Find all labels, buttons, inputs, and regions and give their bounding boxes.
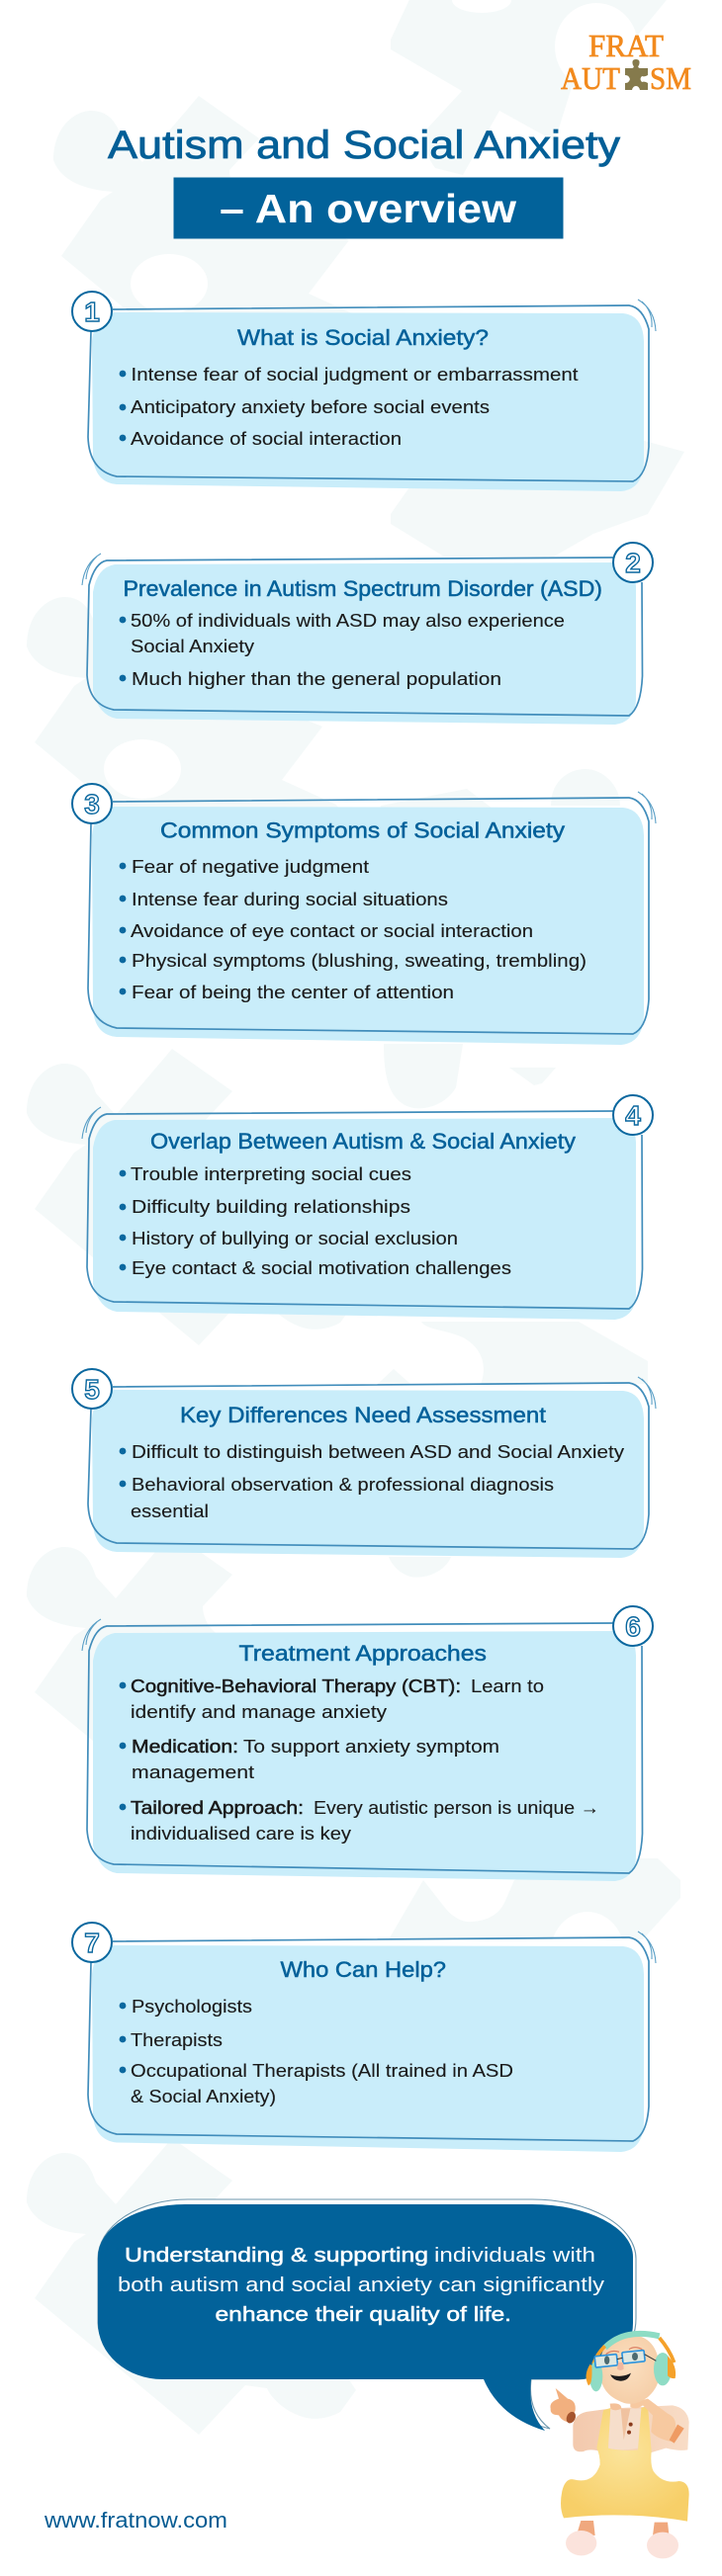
bullet list: Social Anxiety [131, 636, 255, 656]
number badge 5: 5 [84, 1374, 100, 1405]
logo: Frat Autism: FRAT [588, 28, 664, 63]
bullet list: & Social Anxiety) [131, 2086, 276, 2106]
icon: puzzle piece in logo [625, 59, 648, 90]
bullet list: individualised care is key [131, 1823, 352, 1844]
logo: Frat Autism [561, 28, 691, 96]
panel 4: Overlap [82, 1095, 653, 1320]
website url: www.fratnow.com [44, 2508, 227, 2533]
bullet list [120, 1675, 599, 1844]
panel 3: Common Symptoms [72, 784, 656, 1045]
bullet list: Difficult to distinguish between ASD and Social Anxiety [132, 1441, 625, 1462]
bullet list: Cognitive-Behavioral Therapy (CBT): [131, 1675, 461, 1696]
bullet list: Fear of negative judgment [132, 856, 369, 877]
bullet list: Intense fear during social situations [132, 889, 448, 909]
bullet list: Medication: [132, 1736, 238, 1757]
bullet list: Fear of being the center of attention [132, 982, 454, 1002]
number badge 3: 3 [84, 789, 100, 819]
number badge 6: 6 [625, 1611, 641, 1642]
bullet list [120, 1996, 513, 2106]
bullet list: Psychologists [132, 1996, 252, 2017]
heading: Overlap Between Autism & Social Anxiety [150, 1129, 576, 1154]
callout: speech bubble: individuals with [434, 2244, 595, 2267]
bullet list [120, 610, 565, 689]
icon: puzzle-piece mascot with headphones [550, 2334, 689, 2558]
logo: Frat Autism: AUT [561, 60, 620, 96]
bullet list: management [132, 1761, 254, 1782]
number badge 7 [72, 1923, 112, 1962]
subtitle banner: – An overview [220, 186, 516, 231]
panel 1: What is Social Anxiety? [72, 292, 656, 491]
number badge 2 [613, 543, 653, 582]
bullet list: identify and manage anxiety [131, 1701, 388, 1722]
bullet list [120, 1163, 511, 1278]
bullet list: Avoidance of social interaction [131, 428, 402, 449]
subtitle banner [174, 178, 564, 239]
bullet list: Eye contact & social motivation challenges [132, 1257, 511, 1278]
number badge 4 [613, 1095, 653, 1135]
bullet list: History of bullying or social exclusion [132, 1228, 458, 1248]
heading: What is Social Anxiety? [237, 325, 489, 350]
title: Autism and Social Anxiety [108, 124, 620, 167]
bullet list: Learn to [471, 1675, 544, 1696]
panel 6: Treatment Approaches [82, 1606, 653, 1881]
number badge 4: 4 [625, 1100, 641, 1131]
number badge 1 [72, 292, 112, 331]
heading: Who Can Help? [281, 1957, 446, 1982]
heading: Common Symptoms of Social Anxiety [160, 818, 565, 842]
bullet list: Behavioral observation & professional diagnosis [132, 1474, 554, 1495]
bullet list [120, 364, 578, 449]
callout: speech bubble: enhance their quality of life. [216, 2303, 511, 2326]
number badge 6 [613, 1606, 653, 1646]
panel 5: Key Differences [72, 1369, 656, 1558]
bullet list: To support anxiety symptom [243, 1736, 499, 1757]
number badge 1: 1 [84, 297, 100, 327]
bullet list: Avoidance of eye contact or social interaction [131, 920, 533, 941]
bullet list: Every autistic person is unique → [314, 1797, 599, 1818]
bullet list [120, 1441, 625, 1521]
heading: Treatment Approaches [239, 1641, 487, 1666]
bullet list: Tailored Approach: [131, 1797, 304, 1818]
bullet list [120, 856, 587, 1002]
bullet list: Much higher than the general population [132, 668, 501, 689]
bullet list: essential [131, 1501, 209, 1521]
callout: speech bubble [98, 2199, 636, 2431]
bullet list: Occupational Therapists (All trained in ASD [131, 2060, 513, 2081]
panel 7: Who Can Help? [72, 1923, 656, 2152]
callout: speech bubble: Understanding & supporting [125, 2244, 428, 2267]
number badge 5 [72, 1369, 112, 1409]
logo: Frat Autism: SM [650, 60, 691, 96]
bullet list: Anticipatory anxiety before social events [131, 396, 490, 417]
heading: Prevalence in Autism Spectrum Disorder (ASD) [123, 576, 602, 601]
bullet list: Intense fear of social judgment or embarrassment [131, 364, 578, 385]
heading: Key Differences Need Assessment [180, 1403, 546, 1427]
number badge 2: 2 [625, 548, 641, 578]
bullet list: Difficulty building relationships [132, 1196, 410, 1217]
callout: speech bubble: both autism and social anxiety can significantly [118, 2274, 605, 2296]
bullet list: Therapists [131, 2029, 223, 2050]
bullet list: 50% of individuals with ASD may also experience [131, 610, 565, 631]
panel 2: Prevalence in ASD [82, 543, 653, 725]
number badge 3 [72, 784, 112, 823]
bullet list: Physical symptoms (blushing, sweating, trembling) [132, 950, 587, 971]
number badge 7: 7 [84, 1928, 100, 1958]
bullet list: Trouble interpreting social cues [131, 1163, 411, 1184]
